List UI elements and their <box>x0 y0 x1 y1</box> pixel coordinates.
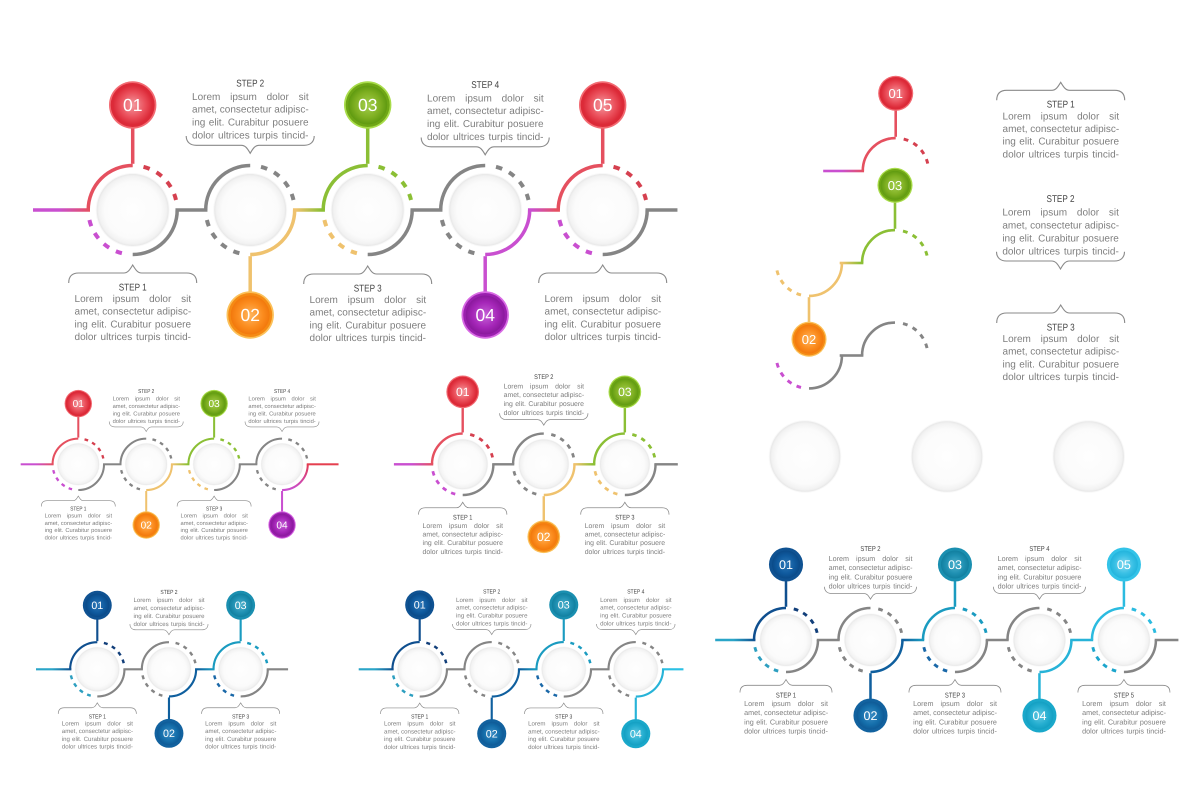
lead-in line <box>36 668 71 670</box>
text block: step 2 <box>452 589 531 635</box>
text block: step 2: STEP 2 <box>160 589 178 596</box>
text block: step 1: dolor ultrices turpis tincid- <box>744 728 828 736</box>
text block: step 2: amet, consectetur adipisc- <box>113 403 180 410</box>
text block: step 1: amet, consectetur adipisc- <box>45 520 112 526</box>
text block: step 4: amet, consectetur adipisc- <box>600 605 672 611</box>
text block: step 4: ing elit. Curabitur posuere <box>600 613 672 619</box>
empty disc 1 <box>769 420 841 493</box>
text block: step 3: amet, consectetur adipisc- <box>180 520 248 526</box>
text block: step 1 <box>380 703 459 751</box>
text block: step 3: STEP 3 <box>945 692 965 700</box>
step node 01 <box>392 590 466 697</box>
exploded parts: gray lower connector <box>777 356 842 388</box>
step node 01 <box>53 390 122 490</box>
right text block: step 3: amet, consectetur adipisc- <box>1002 347 1119 358</box>
right text block: step 2: ing elit. Curabitur posuere <box>1002 233 1119 244</box>
text block: step 4: ing elit. Curabitur posuere <box>427 119 544 130</box>
text block: step 5: STEP 5 <box>1114 692 1134 700</box>
exploded parts: green connector with badge 03 <box>840 168 927 264</box>
step node 04: 04 <box>1032 708 1047 723</box>
text block: step 5 <box>1078 680 1170 736</box>
step node 02: 02 <box>486 728 498 740</box>
right text block: step 3: dolor ultrices turpis tincid- <box>1002 372 1119 383</box>
text block: step 1 <box>41 496 115 541</box>
text block: step 3: ing elit. Curabitur posuere <box>309 320 426 331</box>
step node 03: 03 <box>558 599 570 611</box>
text block: step 5: Lorem ipsum dolor sit <box>1082 700 1166 708</box>
text block: step 2: amet, consectetur adipisc- <box>504 392 584 399</box>
text block: step 2: ing elit. Curabitur posuere <box>456 613 528 619</box>
text block: step 2: dolor ultrices turpis tincid- <box>192 131 308 142</box>
text block: step 3: amet, consectetur adipisc- <box>528 729 600 735</box>
step node 02: 02 <box>863 708 877 723</box>
step node 02 orange: 02 <box>240 305 260 325</box>
text block: step 2: dolor ultrices turpis tincid- <box>829 583 912 591</box>
text block: step 2: STEP 2 <box>483 589 500 595</box>
text block: step 4: Lorem ipsum dolor sit <box>600 597 672 604</box>
text block: step 3: amet, consectetur adipisc- <box>205 728 276 735</box>
step node 03 <box>594 375 678 495</box>
text block: step 3: dolor ultrices turpis tincid- <box>180 535 248 541</box>
step node 01 red: 01 <box>123 95 142 115</box>
text block: step 1: dolor ultrices turpis tincid- <box>74 332 191 343</box>
step node 03 <box>188 390 257 490</box>
text block: step 1: Lorem ipsum dolor sit <box>74 294 191 305</box>
text block: step 3: STEP 3 <box>206 506 222 512</box>
text block: step 3: Lorem ipsum dolor sit <box>585 522 665 530</box>
step node 05: 05 <box>1117 557 1131 572</box>
text block: step 2: amet, consectetur adipisc- <box>829 564 913 572</box>
text block: step 1 <box>419 502 507 556</box>
timeline chart: small four steps warm <box>21 388 339 541</box>
text block: step 3: dolor ultrices turpis tincid- <box>913 728 997 736</box>
right text block: step 1: Lorem ipsum dolor sit <box>1002 111 1119 122</box>
text block: step 2: ing elit. Curabitur posuere <box>829 574 913 581</box>
text block: step 2 <box>500 374 588 425</box>
text block: step 3: ing elit. Curabitur posuere <box>528 736 600 743</box>
step node 03: 03 <box>948 557 962 572</box>
text block: step 3: Lorem ipsum dolor sit <box>309 295 426 306</box>
text block: step 2: STEP 2 <box>534 374 553 381</box>
text block: step 3: amet, consectetur adipisc- <box>913 709 997 717</box>
text block: step 3: dolor ultrices turpis tincid- <box>205 744 276 750</box>
text block: step 2: dolor ultrices turpis tincid- <box>504 410 584 417</box>
text block: step 4: STEP 4 <box>274 388 290 395</box>
text block: step 4: STEP 4 <box>627 589 645 595</box>
text block: step 1: ing elit. Curabitur posuere <box>74 319 191 330</box>
timeline chart: medium three steps warm <box>394 374 678 556</box>
text block: step 3: Lorem ipsum dolor sit <box>205 721 276 727</box>
text block: step 4: ing elit. Curabitur posuere <box>998 574 1082 581</box>
text block: step 3: dolor ultrices turpis tincid- <box>309 333 426 344</box>
step node 04 <box>609 642 683 748</box>
text block: step 1: amet, consectetur adipisc- <box>74 307 191 318</box>
text block: step 1: STEP 1 <box>89 713 106 720</box>
lead-in line <box>33 208 90 212</box>
step node 04: 04 <box>276 519 288 531</box>
text block: step 4: STEP 4 <box>1029 545 1050 553</box>
step node 01: 01 <box>73 398 84 410</box>
text block: step 1: dolor ultrices turpis tincid- <box>423 548 503 556</box>
text block: step 1: STEP 1 <box>70 506 86 512</box>
text block: step 2: Lorem ipsum dolor sit <box>504 383 584 390</box>
step node 01 <box>754 547 840 672</box>
text block: step 3: ing elit. Curabitur posuere <box>913 719 997 726</box>
text block: fifth step without heading: Lorem ipsum dolor sit <box>544 294 661 305</box>
text block: step 2 <box>130 589 208 635</box>
text block: step 1: ing elit. Curabitur posuere <box>423 540 503 547</box>
text block: step 4 <box>421 80 549 155</box>
text block: step 4: STEP 4 <box>471 80 500 91</box>
right text block: step 1: amet, consectetur adipisc- <box>1002 124 1119 135</box>
step node 02 orange <box>206 166 325 339</box>
text block: step 4: dolor ultrices turpis tincid- <box>248 418 316 425</box>
text block: step 2: amet, consectetur adipisc- <box>133 605 205 612</box>
step node 03: 03 <box>618 385 632 399</box>
text block: step 3: STEP 3 <box>615 514 635 522</box>
step node 05 red: 05 <box>593 95 612 115</box>
step node 03 green: 03 <box>358 95 377 115</box>
step node 02: 02 <box>163 727 175 740</box>
text block: step 4 <box>245 388 319 432</box>
text block: step 1: Lorem ipsum dolor sit <box>423 522 503 530</box>
exploded parts: first connector with badge 01: 01 <box>888 86 903 101</box>
text block: step 3 <box>202 703 280 750</box>
text block: step 1: Lorem ipsum dolor sit <box>744 700 828 708</box>
text block: step 2: amet, consectetur adipisc- <box>456 605 528 611</box>
text block: step 2: STEP 2 <box>138 388 154 395</box>
timeline chart: small four steps blue <box>359 589 683 751</box>
right text block: step 2: amet, consectetur adipisc- <box>1002 220 1119 231</box>
text block: step 2 <box>109 388 183 432</box>
step node 02 <box>838 608 924 733</box>
text block: step 2: Lorem ipsum dolor sit <box>192 92 309 103</box>
step node 01 <box>70 591 143 696</box>
text block: step 3: Lorem ipsum dolor sit <box>528 721 600 728</box>
text block: step 3 <box>177 496 251 541</box>
text block: step 3: amet, consectetur adipisc- <box>585 531 665 539</box>
text block: step 1: ing elit. Curabitur posuere <box>62 736 133 743</box>
text block: fifth step without heading: dolor ultrices turpis tincid- <box>544 332 661 343</box>
exploded parts: yellow connector with badge 02 <box>777 263 842 357</box>
text block: step 2: ing elit. Curabitur posuere <box>113 411 180 417</box>
text block: step 2: ing elit. Curabitur posuere <box>192 118 309 129</box>
step node 01 <box>432 375 514 495</box>
step node 03 <box>214 591 288 696</box>
text block: step 1: amet, consectetur adipisc- <box>62 728 133 735</box>
text block: step 1 <box>740 680 832 736</box>
text block: step 1 <box>58 703 136 750</box>
step node 01: 01 <box>779 557 793 572</box>
lead-in line <box>21 463 54 465</box>
step node 02 <box>513 434 595 553</box>
lead-in line <box>359 668 394 670</box>
text block: step 3: dolor ultrices turpis tincid- <box>528 744 599 751</box>
text block: fifth step without heading: ing elit. Curabitur posuere <box>544 319 661 330</box>
text block: step 1: ing elit. Curabitur posuere <box>45 527 112 534</box>
text block: step 4: amet, consectetur adipisc- <box>427 106 544 117</box>
text block: step 2: Lorem ipsum dolor sit <box>456 597 528 604</box>
text block: fifth step without heading <box>539 265 667 343</box>
right text block: step 1: dolor ultrices turpis tincid- <box>1002 149 1119 160</box>
text block: step 3: Lorem ipsum dolor sit <box>913 700 997 708</box>
text block: step 1: Lorem ipsum dolor sit <box>45 513 112 519</box>
text block: step 4: dolor ultrices turpis tincid- <box>998 583 1081 591</box>
text block: step 1: STEP 1 <box>119 282 147 293</box>
text block: step 3 <box>581 502 669 556</box>
text block: step 2 <box>824 545 916 599</box>
lead-in line <box>715 639 755 641</box>
text block: step 4: dolor ultrices turpis tincid- <box>600 621 672 627</box>
text block: step 1: dolor ultrices turpis tincid- <box>45 535 112 541</box>
step node 03 <box>536 590 610 697</box>
text block: step 3 <box>909 680 1001 736</box>
step node 01: 01 <box>414 599 426 611</box>
empty disc 3 <box>1052 420 1125 493</box>
text block: step 3: Lorem ipsum dolor sit <box>180 513 248 519</box>
text block: step 2: STEP 2 <box>860 545 881 553</box>
text block: step 5: ing elit. Curabitur posuere <box>1082 719 1166 726</box>
text block: step 1: amet, consectetur adipisc- <box>744 709 828 717</box>
text block: step 3: amet, consectetur adipisc- <box>309 308 426 319</box>
text block: step 1: STEP 1 <box>411 714 428 720</box>
step node 04 <box>1007 608 1093 733</box>
right text block: step 2: STEP 2 <box>1046 194 1074 205</box>
text block: step 4: amet, consectetur adipisc- <box>998 564 1082 572</box>
text block: step 1: amet, consectetur adipisc- <box>423 531 503 539</box>
text block: step 2 <box>186 78 314 153</box>
text block: step 4 <box>597 589 675 635</box>
text block: step 3: STEP 3 <box>555 714 573 720</box>
lead-in line <box>394 463 433 466</box>
right text block: step 3 <box>997 305 1125 383</box>
text block: step 1: dolor ultrices turpis tincid- <box>384 744 455 751</box>
step node 01: 01 <box>91 599 103 611</box>
text block: step 3: STEP 3 <box>354 283 382 294</box>
step node 02 <box>120 439 189 539</box>
step node 03: 03 <box>209 398 220 410</box>
right text block: step 1: STEP 1 <box>1047 100 1075 111</box>
timeline chart: small three steps blue <box>36 589 288 750</box>
text block: step 3 <box>304 266 432 344</box>
right text block: step 1: ing elit. Curabitur posuere <box>1002 137 1119 148</box>
text block: step 3: dolor ultrices turpis tincid- <box>585 548 665 556</box>
text block: step 4 <box>993 545 1085 599</box>
text block: step 4: dolor ultrices turpis tincid- <box>427 132 543 143</box>
exploded parts: green connector with badge 03: 03 <box>888 178 902 193</box>
text block: step 1: dolor ultrices turpis tincid- <box>62 744 133 750</box>
text block: step 4: Lorem ipsum dolor sit <box>427 94 544 104</box>
step node 01 red <box>88 81 207 254</box>
text block: step 1: STEP 1 <box>453 514 472 522</box>
step node 04 purple: 04 <box>475 305 495 325</box>
text block: step 3: STEP 3 <box>232 713 249 720</box>
step node 03 green <box>323 81 442 254</box>
text block: step 1: STEP 1 <box>776 692 796 700</box>
text block: step 1: Lorem ipsum dolor sit <box>62 721 133 727</box>
exploded parts: gray upper connector <box>840 323 927 357</box>
text block: step 2: STEP 2 <box>236 78 264 90</box>
step node 04: 04 <box>630 728 642 740</box>
text block: step 2: dolor ultrices turpis tincid- <box>113 418 180 425</box>
right text block: step 2 <box>996 194 1124 269</box>
right text block: step 3: ing elit. Curabitur posuere <box>1002 359 1119 370</box>
text block: step 2: Lorem ipsum dolor sit <box>829 555 913 563</box>
text block: step 2: dolor ultrices turpis tincid- <box>133 621 205 628</box>
text block: step 1: amet, consectetur adipisc- <box>384 729 456 735</box>
timeline chart: large five steps <box>33 78 677 344</box>
text block: step 4: Lorem ipsum dolor sit <box>998 555 1082 563</box>
step node 05 red <box>558 81 677 254</box>
step node 04 purple <box>441 166 560 339</box>
text block: step 4: amet, consectetur adipisc- <box>248 403 316 410</box>
text block: step 3: ing elit. Curabitur posuere <box>180 527 248 534</box>
text block: step 1: ing elit. Curabitur posuere <box>384 736 456 743</box>
text block: step 3 <box>525 703 603 751</box>
text block: step 2: amet, consectetur adipisc- <box>192 105 309 116</box>
step node 03 <box>923 547 1009 672</box>
text block: step 2: Lorem ipsum dolor sit <box>133 597 205 604</box>
right text block: step 3: Lorem ipsum dolor sit <box>1002 334 1119 345</box>
step node 04 <box>256 439 339 539</box>
text block: step 1 <box>69 265 197 343</box>
text block: fifth step without heading: amet, consectetur adipisc- <box>544 307 661 318</box>
step node 02: 02 <box>537 530 550 544</box>
step node 03: 03 <box>235 599 247 611</box>
step node 01: 01 <box>456 385 469 399</box>
text block: step 2: Lorem ipsum dolor sit <box>113 396 180 402</box>
text block: step 4: ing elit. Curabitur posuere <box>248 411 316 417</box>
step node 02 <box>142 642 215 748</box>
step node 02 <box>464 642 538 748</box>
right text block: step 2: dolor ultrices turpis tincid- <box>1002 246 1119 257</box>
text block: step 1: ing elit. Curabitur posuere <box>744 719 828 726</box>
text block: step 5: amet, consectetur adipisc- <box>1082 709 1166 717</box>
step node 05 <box>1092 547 1178 672</box>
text block: step 2: dolor ultrices turpis tincid- <box>456 621 527 627</box>
text block: step 3: ing elit. Curabitur posuere <box>585 540 665 547</box>
text block: step 2: ing elit. Curabitur posuere <box>133 613 205 620</box>
right text block: step 1 <box>997 82 1125 160</box>
exploded parts: first connector with badge 01 <box>823 76 928 172</box>
text block: step 3: ing elit. Curabitur posuere <box>205 736 276 743</box>
empty disc 2 <box>911 420 983 493</box>
text block: step 1: Lorem ipsum dolor sit <box>384 721 456 728</box>
timeline chart: medium five steps blue <box>715 545 1178 736</box>
text block: step 5: dolor ultrices turpis tincid- <box>1082 728 1166 736</box>
right text block: step 3: STEP 3 <box>1047 322 1075 333</box>
text block: step 4: Lorem ipsum dolor sit <box>248 396 316 402</box>
exploded parts: yellow connector with badge 02: 02 <box>802 332 816 347</box>
right text block: step 2: Lorem ipsum dolor sit <box>1002 208 1119 219</box>
text block: step 2: ing elit. Curabitur posuere <box>504 401 584 408</box>
step node 02: 02 <box>141 519 152 531</box>
